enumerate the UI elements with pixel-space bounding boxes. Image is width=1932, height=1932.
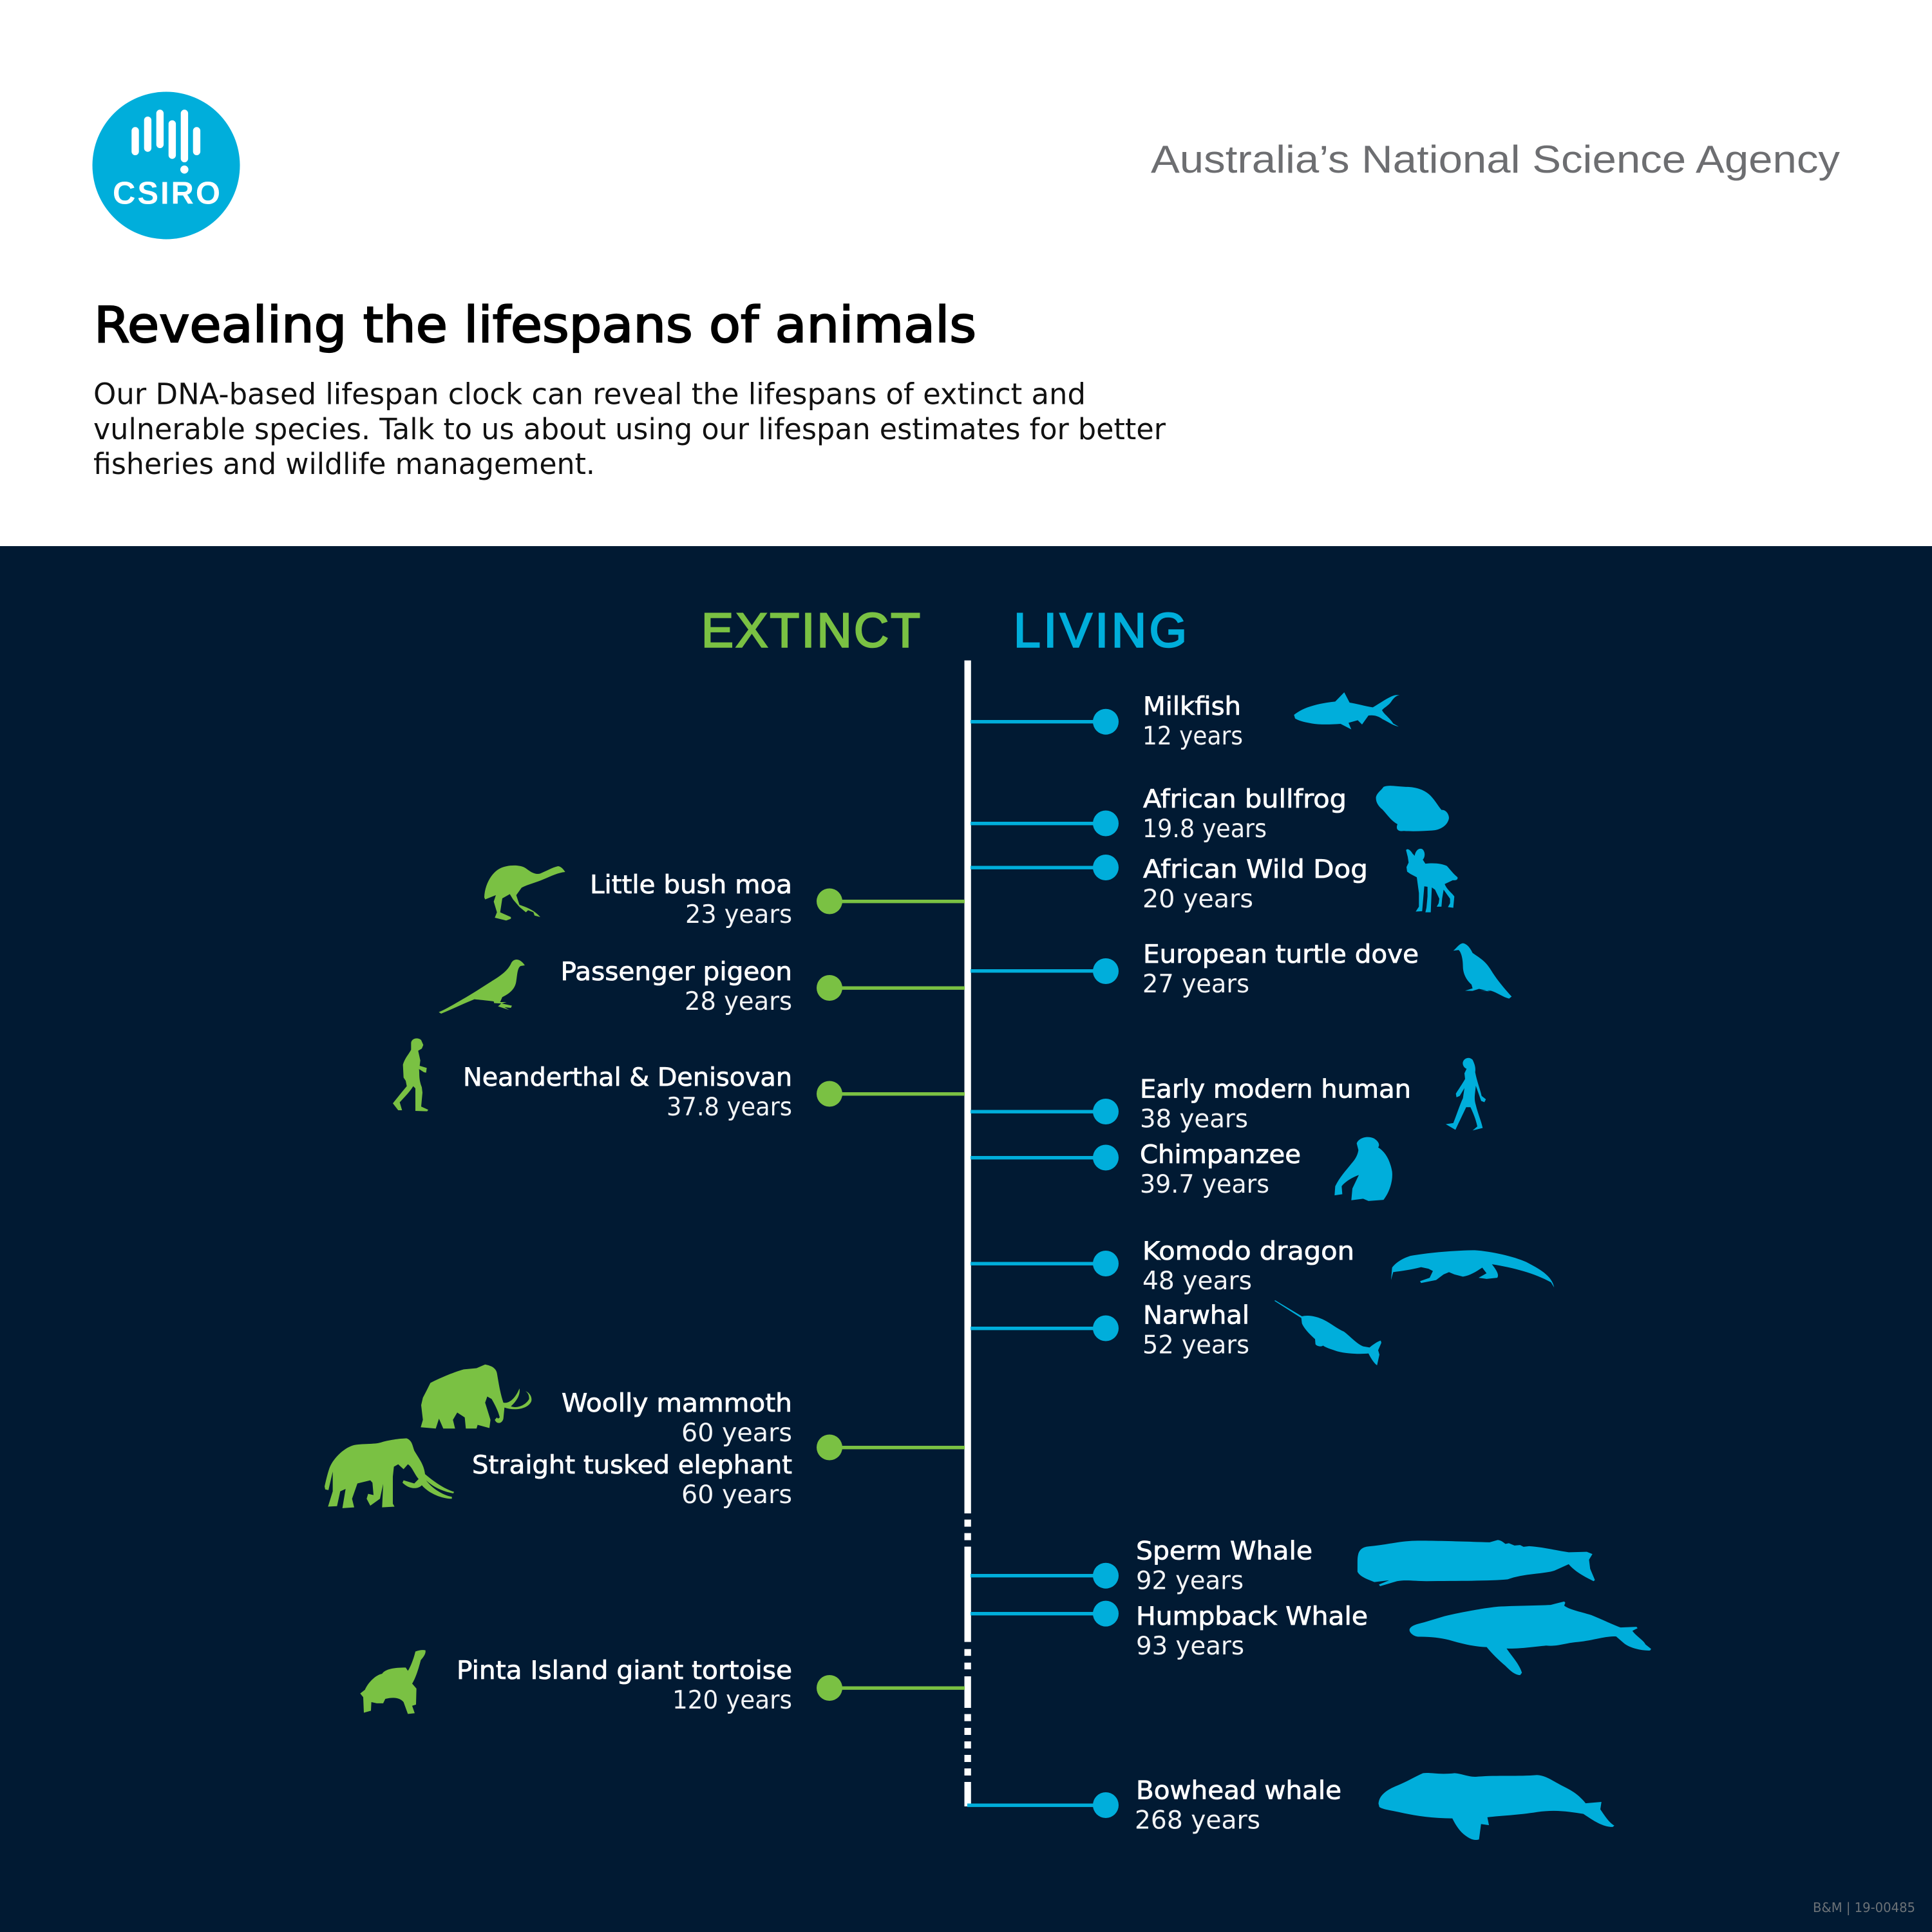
intro text block: fisheries and wildlife management. [93,447,595,481]
item: Pinta Island giant tortoise: Pinta Island giant tortoise [457,1656,792,1685]
item: European turtle dove: European turtle dove [1143,940,1419,969]
item: Neanderthal and Denisovan [393,1038,965,1122]
item: Komodo dragon [971,1236,1554,1296]
item: Early modern human [971,1058,1486,1133]
panel: dark timeline background [0,546,1932,1932]
logo: CSIRO: CSIRO [113,176,220,211]
item: Neanderthal and Denisovan: Neanderthal & Denisovan [463,1063,792,1092]
item: European turtle dove: 27 years [1142,969,1249,999]
item: Humpback Whale [971,1601,1651,1675]
item: Bowhead whale [967,1773,1615,1840]
item: Neanderthal and Denisovan: 37.8 years [667,1092,792,1122]
item: African Wild Dog [971,849,1457,914]
credit code: B&M | 19-00485 [1813,1900,1915,1916]
item: Komodo dragon: 48 years [1142,1266,1252,1296]
item: European turtle dove [971,940,1511,999]
item: Chimpanzee [971,1137,1392,1201]
item: Milkfish [971,692,1399,751]
item: Passenger pigeon: 28 years [685,987,792,1016]
item: Sperm Whale: 92 years [1136,1566,1244,1596]
item: Milkfish: 12 years [1142,721,1243,751]
item: Woolly mammoth and Straight tusked elephant: 60 years [681,1480,792,1510]
item: African Wild Dog: 20 years [1142,884,1253,914]
item: Passenger pigeon [439,957,965,1016]
item: Passenger pigeon: Passenger pigeon [560,957,792,987]
intro text block: Our DNA-based lifespan clock can reveal the lifespans of extinct and [93,377,1086,412]
item: Narwhal [971,1300,1381,1365]
item: Chimpanzee: 39.7 years [1140,1170,1269,1199]
item: Komodo dragon: Komodo dragon [1142,1236,1354,1266]
item: Sperm Whale [971,1537,1595,1596]
item: African bullfrog: African bullfrog [1143,784,1347,814]
item: Little bush moa: 23 years [685,900,792,929]
item: Sperm Whale: Sperm Whale [1136,1537,1312,1566]
item: African bullfrog [971,784,1449,844]
item: Early modern human: Early modern human [1140,1074,1411,1104]
intro text block: vulnerable species. Talk to us about using our lifespan estimates for better [93,412,1166,446]
item: Little bush moa [484,866,965,929]
item: Narwhal: 52 years [1142,1331,1249,1360]
item: Humpback Whale: Humpback Whale [1136,1602,1368,1631]
title: Revealing the lifespans of animals [94,297,976,354]
item: Pinta Island giant tortoise [360,1650,965,1715]
timeline axis [965,661,971,1806]
logo: CSIRO [93,91,240,240]
item: Pinta Island giant tortoise: 120 years [672,1685,792,1715]
item: Woolly mammoth and Straight tusked elephant: Straight tusked elephant [472,1450,792,1480]
item: Milkfish: Milkfish [1143,692,1241,721]
item: Early modern human: 38 years [1140,1104,1248,1133]
item: Humpback Whale: 93 years [1136,1631,1244,1661]
tagline: Australia’s National Science Agency [1151,138,1840,181]
item: African Wild Dog: African Wild Dog [1143,855,1368,884]
item: Little bush moa: Little bush moa [590,870,792,900]
item: African bullfrog: 19.8 years [1142,814,1267,844]
item: Bowhead whale: Bowhead whale [1136,1776,1341,1806]
item: Woolly mammoth and Straight tusked elephant: Woolly mammoth [562,1388,792,1418]
heading: living: LIVING [1014,603,1187,658]
item: Narwhal: Narwhal [1143,1301,1249,1331]
heading: extinct: EXTINCT [701,603,920,658]
item: Woolly mammoth and Straight tusked elephant: 60 years [681,1418,792,1448]
item: Woolly mammoth and Straight tusked elephant [325,1365,965,1510]
intro text block [93,377,1166,481]
item: Chimpanzee: Chimpanzee [1140,1140,1301,1170]
item: Bowhead whale: 268 years [1135,1806,1260,1835]
